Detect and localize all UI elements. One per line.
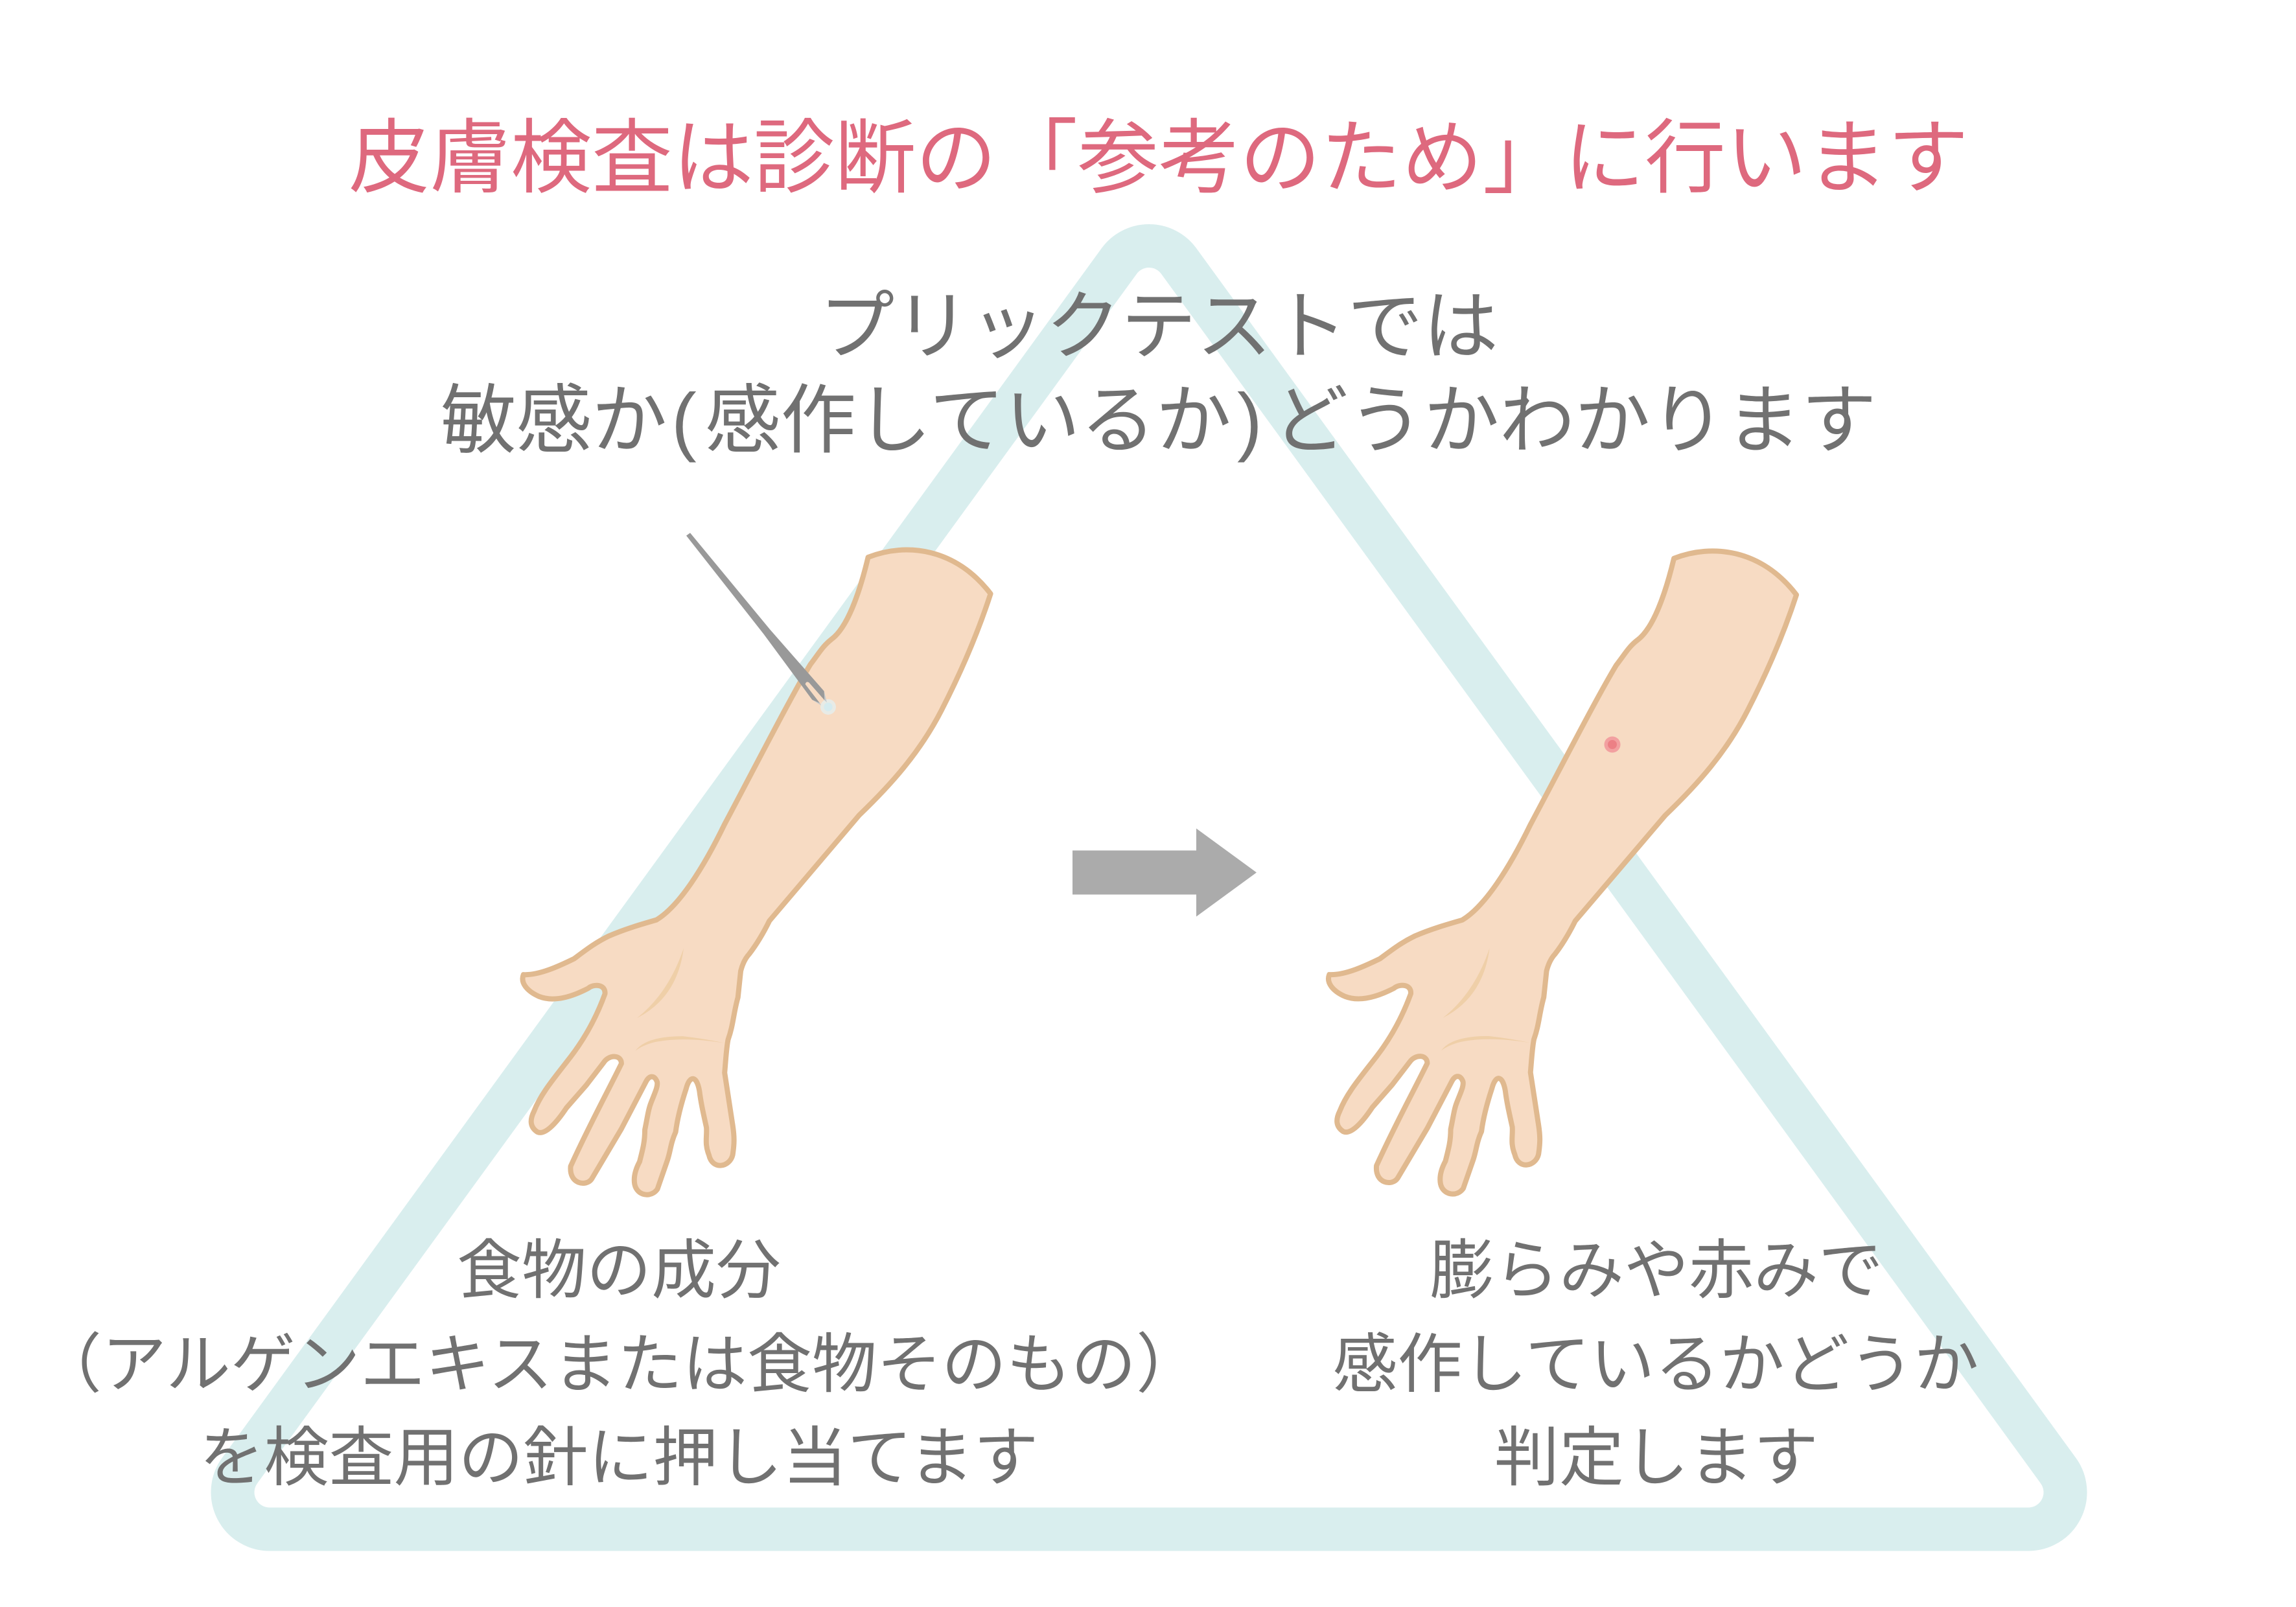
intro text: プリックテストでは: [819, 284, 1498, 369]
arm outline: [522, 550, 991, 1195]
right caption: 判定します: [1494, 1422, 1818, 1494]
intro text: 敏感か: [441, 378, 667, 463]
intro text: ): [1237, 378, 1262, 463]
arm outline: [1328, 551, 1796, 1194]
right caption: 膨らみや赤みで: [1430, 1234, 1883, 1307]
intro text: (: [671, 378, 697, 463]
title: 皮膚検査は診断の「参考のため」に行います: [349, 113, 1969, 203]
intro text: どうかわかります: [1273, 378, 1877, 463]
intro text: 感作しているか: [705, 378, 1231, 463]
left arm with needle: [522, 533, 991, 1195]
intro text: [441, 284, 1877, 463]
left caption: [37, 1234, 1201, 1494]
right caption: 感作しているかどうか: [1332, 1328, 1979, 1401]
right caption: [1332, 1234, 1979, 1494]
arrow: [1073, 828, 1257, 916]
right arm with reaction: [1328, 551, 1796, 1194]
icon: skin reaction spot: [1605, 736, 1620, 753]
background triangle: [233, 246, 2065, 1529]
left caption: を検査用の針に押し当てます: [200, 1422, 1038, 1494]
left caption: （アルゲンエキスまたは食物そのもの）: [37, 1328, 1201, 1401]
icon: test needle: [686, 533, 836, 715]
left caption: 食物の成分: [457, 1234, 781, 1307]
